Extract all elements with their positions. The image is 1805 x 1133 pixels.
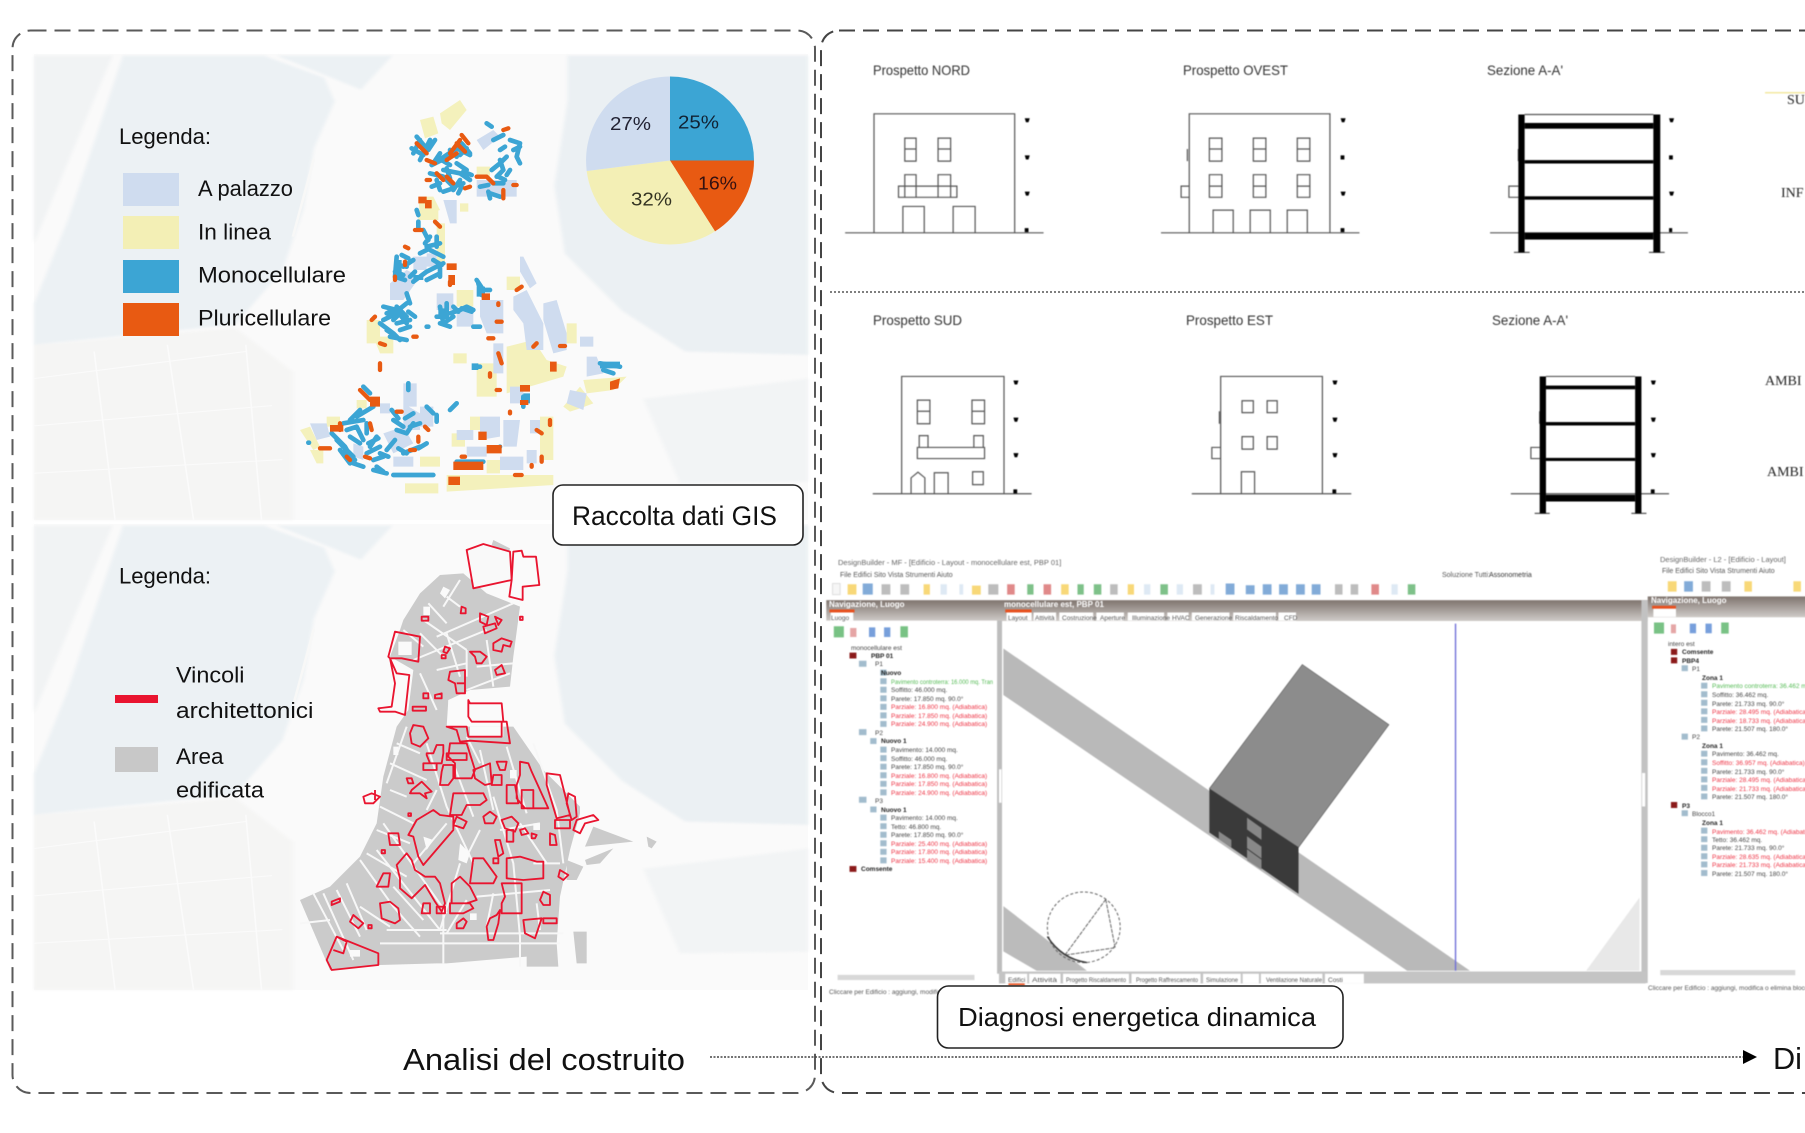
cropped labels at right edge [1765, 92, 1805, 480]
window menu text: monocellulare est, PBP 01 [1004, 600, 1104, 609]
status bars and bottom tabs: Costi [1328, 977, 1343, 984]
right navigation tree text: Parete: 21.507 mq. 180.0° [1712, 725, 1788, 733]
left navigation tree text: Parziale: 24.900 mq. (Adiabatica) [891, 721, 987, 728]
window menu text: Luogo [831, 615, 849, 622]
left navigation tree text: Parete: 17.850 mq. 90.0° [891, 695, 964, 703]
left navigation tree text: P1 [875, 661, 883, 668]
left navigation tree text: Comsente [861, 866, 893, 873]
callout: diagnosi energetica dinamica: Diagnosi energetica dinamica [958, 1002, 1317, 1032]
left navigation tree text: Tetto: 46.800 mq. [891, 824, 941, 831]
window menu text: File Edifici Sito Vista Strumenti Aiuto [840, 572, 953, 579]
window menu text: HVAC [1172, 615, 1190, 622]
left navigation tree text: Nuovo [881, 670, 901, 677]
legend: vincoli: Legenda: [119, 564, 211, 588]
right navigation tree text: P2 [1692, 734, 1700, 741]
3D building [1209, 664, 1389, 894]
pie chart: tipologie: 32% [631, 190, 672, 210]
window menu text: Costruzione [1062, 615, 1097, 622]
level markers [1013, 118, 1674, 493]
left navigation tree text: Pavimento controterra: 16.000 mq. Tran [891, 679, 993, 686]
window chrome and canvas [826, 581, 1805, 985]
left navigation tree text: Parziale: 25.400 mq. (Adiabatica) [891, 841, 987, 848]
prospetto ovest [1161, 114, 1359, 233]
left navigation tree text: Parziale: 17.850 mq. (Adiabatica) [891, 781, 987, 788]
window menu text: Soluzione Tutti: [1442, 572, 1490, 579]
left navigation tree text: Parziale: 16.800 mq. (Adiabatica) [891, 773, 987, 780]
prospetto nord [845, 114, 1044, 233]
left tree panel [826, 621, 997, 974]
callout: raccolta dati GIS: Raccolta dati GIS [572, 501, 777, 531]
legend: tipologie: In linea [198, 220, 272, 244]
cropped labels at right edge: INF [1781, 186, 1804, 201]
right navigation tree text: P1 [1692, 666, 1700, 673]
status bars and bottom tabs: Cliccare per Edificio : aggiungi, modifica o elimina [829, 989, 972, 996]
left navigation tree text: Parziale: 17.800 mq. (Adiabatica) [891, 849, 987, 856]
left navigation tree text: Parziale: 15.400 mq. (Adiabatica) [891, 858, 987, 865]
window menu text [829, 555, 1786, 622]
left navigation tree text: P3 [875, 798, 883, 805]
built area mass [300, 540, 657, 970]
tree action icons [834, 622, 1729, 637]
viewport [1002, 621, 1641, 972]
sezione inferiore [1511, 376, 1669, 513]
sezione superiore [1490, 114, 1688, 252]
left navigation tree text: Soffitto: 46.000 mq. [891, 756, 947, 763]
right navigation tree text: Parete: 21.733 mq. 90.0° [1712, 768, 1785, 776]
left navigation tree text: Parziale: 17.850 mq. (Adiabatica) [891, 713, 987, 720]
cropped labels at right edge: SU [1787, 93, 1805, 108]
heading cropped: Di: Di [1773, 1041, 1802, 1076]
status bars and bottom tabs: Progetto Raffrescamento [1136, 977, 1198, 984]
map blocks coloured by type [300, 100, 627, 493]
left navigation tree text: monocellulare est [851, 645, 902, 652]
drawing titles [873, 62, 1568, 328]
status bars and bottom tabs: Simulazione [1206, 977, 1238, 984]
right navigation tree text: Parete: 21.733 mq. 90.0° [1712, 844, 1785, 852]
legend: tipologie [119, 124, 346, 336]
left navigation tree text: Parete: 17.850 mq. 90.0° [891, 831, 964, 839]
prospetto est [1192, 376, 1351, 494]
pie chart: tipologie: 16% [698, 174, 737, 194]
right navigation tree text: Soffitto: 36.462 mq. [1712, 692, 1768, 699]
cropped labels at right edge: AMBI [1767, 465, 1804, 480]
right navigation tree text: Zona 1 [1702, 675, 1723, 682]
status bars and bottom tabs [829, 977, 1805, 996]
right navigation tree text: Zona 1 [1702, 743, 1723, 750]
left navigation tree text: Parziale: 16.800 mq. (Adiabatica) [891, 704, 987, 711]
right navigation tree text: Tetto: 36.462 mq. [1712, 837, 1762, 844]
window menu text: Illuminazione [1132, 615, 1170, 622]
window menu text: Attività [1035, 615, 1055, 622]
callout: raccolta dati GIS [553, 485, 803, 545]
left navigation tree text [851, 645, 993, 873]
status bars and bottom tabs: Ventilazione Naturale [1266, 977, 1322, 984]
drawing titles: Sezione A-A' [1492, 312, 1568, 328]
arrow: dotted process timeline [710, 1050, 1757, 1064]
cropped labels at right edge: AMBI [1765, 374, 1802, 389]
map: tipologie edilizie GIS [34, 54, 808, 520]
window menu text: Navigazione, Luogo [829, 600, 905, 609]
left navigation tree text: Nuovo 1 [881, 807, 907, 814]
left navigation tree text: P2 [875, 730, 883, 737]
status bars and bottom tabs: Progetto Riscaldamento [1066, 977, 1126, 984]
drawing titles: Sezione A-A' [1487, 62, 1563, 78]
heading: analisi del costruito: Analisi del costruito [403, 1042, 685, 1077]
toolbar icons [833, 583, 1415, 595]
panel: analisi del costruito [12, 30, 815, 1093]
window menu text: File Edifici Sito Vista Strumenti Aiuto [1662, 568, 1775, 575]
window menu text: DesignBuilder - MF - [Edificio - Layout - monocellulare est, PBP 01] [838, 558, 1061, 567]
legend: tipologie: A palazzo [198, 176, 293, 201]
right navigation tree text: Soffitto: 36.957 mq. (Adiabatica) [1712, 760, 1805, 767]
right navigation tree text: Pavimento: 36.462 mq. [1712, 751, 1779, 758]
left navigation tree text: Parete: 17.850 mq. 90.0° [891, 763, 964, 771]
status bars and bottom tabs: Edifici [1008, 977, 1025, 984]
panel header band [826, 600, 1648, 621]
prospetto sud [873, 376, 1032, 494]
tree root icons [850, 649, 1677, 872]
right navigation tree text: PBP4 [1682, 658, 1699, 665]
legend: tipologie: Pluricellulare [198, 306, 331, 330]
pie chart: tipologie: 25% [678, 112, 719, 132]
callout: diagnosi energetica dinamica [938, 986, 1343, 1048]
pie chart: tipologie: 27% [610, 114, 651, 134]
left navigation tree text: Pavimento: 14.000 mq. [891, 815, 958, 822]
window menu text: Navigazione, Luogo [1651, 596, 1727, 605]
legend: vincoli: edificata [176, 778, 265, 802]
window menu text: Layout [1008, 615, 1028, 622]
legend: vincoli: Vincoli [176, 662, 244, 688]
second window toolbar icons [1668, 581, 1801, 592]
legend: tipologie: Monocellulare [198, 262, 346, 288]
right navigation tree text: intero est [1668, 641, 1695, 648]
right navigation tree text: Comsente [1682, 649, 1714, 656]
window menu text: CFD [1284, 615, 1298, 622]
window menu text: Riscaldamento [1235, 615, 1278, 622]
right navigation tree text: P3 [1682, 803, 1690, 810]
built area and protected buildings [300, 540, 657, 970]
left navigation tree text: Pavimento: 14.000 mq. [891, 747, 958, 754]
legend: vincoli: architettonici [176, 698, 314, 723]
left navigation tree text: Nuovo 1 [881, 738, 907, 745]
compass [1047, 892, 1120, 963]
right navigation tree text [1668, 641, 1805, 878]
street bands [1003, 649, 1640, 971]
right navigation tree text: Parete: 21.507 mq. 180.0° [1712, 793, 1788, 801]
panel: diagnosi energetica [821, 30, 1805, 1093]
left navigation tree text: PBP 01 [871, 653, 894, 660]
window menu text: Aperture [1100, 615, 1125, 622]
pie chart: tipologie [586, 76, 754, 244]
window menu text: Assonometria [1489, 572, 1532, 579]
window menu text: DesignBuilder - L2 - [Edificio - Layout] [1660, 555, 1786, 564]
left navigation tree text: Parziale: 24.900 mq. (Adiabatica) [891, 790, 987, 797]
right navigation tree text: Zona 1 [1702, 820, 1723, 827]
status bars and bottom tabs: Attività [1032, 977, 1057, 984]
legend: vincoli: Area [176, 744, 224, 769]
legend: tipologie: Legenda: [119, 124, 211, 149]
software screenshot: DesignBuilder [826, 555, 1805, 996]
right navigation tree text: Parete: 21.733 mq. 90.0° [1712, 700, 1785, 708]
legend: vincoli [115, 564, 314, 802]
map: vincoli architettonici [34, 524, 808, 990]
left navigation tree text: Soffitto: 46.000 mq. [891, 687, 947, 694]
drawing titles: Prospetto OVEST [1183, 62, 1288, 78]
window menu text: Generazione [1195, 615, 1233, 622]
elevations and sections drawings [845, 62, 1805, 513]
building drawings [845, 114, 1688, 513]
drawing titles: Prospetto NORD [873, 62, 970, 78]
drawing titles: Prospetto SUD [873, 312, 962, 328]
divider between elevation rows [830, 291, 1805, 293]
right navigation tree text: Parete: 21.507 mq. 180.0° [1712, 870, 1788, 878]
right navigation tree text: Blocco1 [1692, 811, 1716, 818]
tree icons [859, 661, 1707, 876]
drawing titles: Prospetto EST [1186, 312, 1273, 328]
